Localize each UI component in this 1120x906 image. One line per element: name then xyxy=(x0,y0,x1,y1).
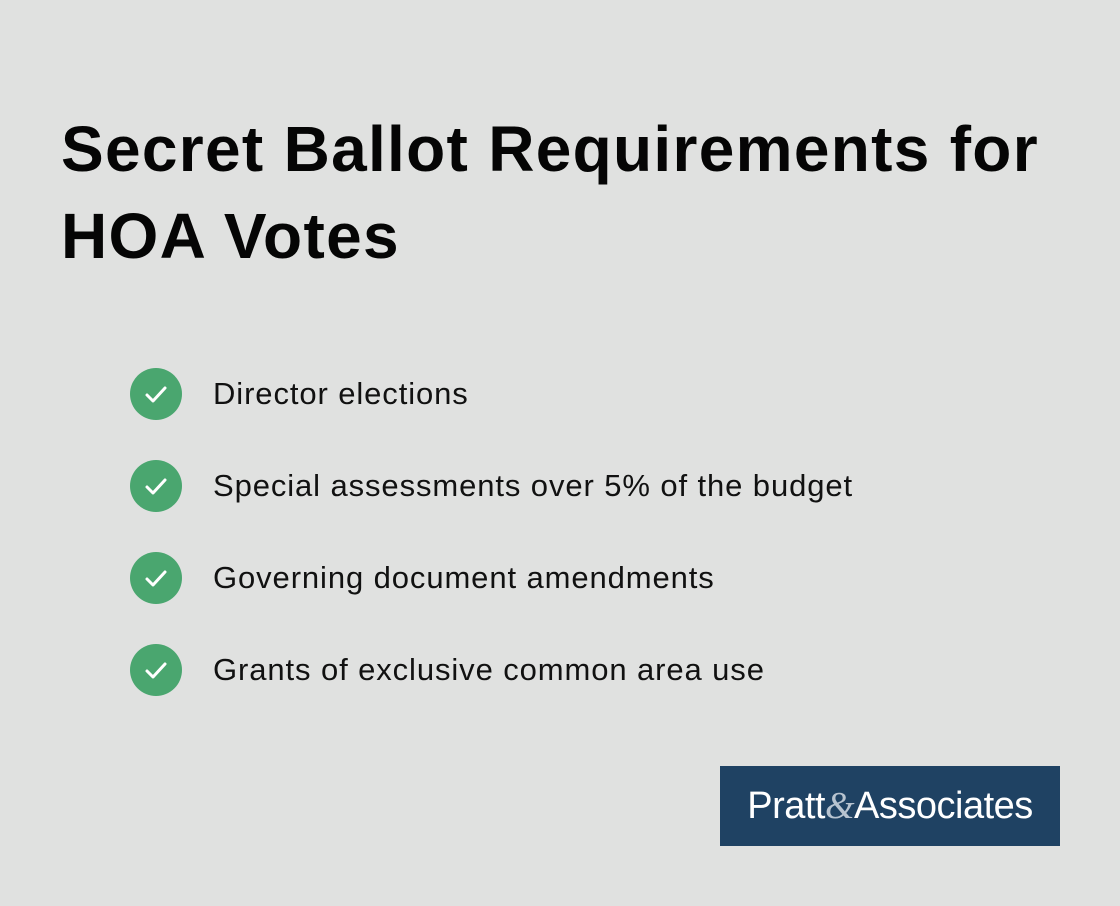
list item: special assessments xyxy=(130,460,853,512)
logo: Pratt&Associates xyxy=(747,785,1033,827)
icon: check xyxy=(130,368,182,420)
title xyxy=(61,113,1039,272)
list item: exclusive use xyxy=(130,644,765,696)
list item: governing docs xyxy=(130,552,715,604)
title: Secret Ballot Requirements for xyxy=(61,113,1039,185)
text: Governing document amendments xyxy=(213,560,715,595)
text: Grants of exclusive common area use xyxy=(213,652,765,687)
logo xyxy=(720,766,1060,846)
title: HOA Votes xyxy=(61,200,400,272)
text: Director elections xyxy=(213,376,469,411)
list item: director elections xyxy=(130,368,469,420)
icon: check xyxy=(130,552,182,604)
icon: check xyxy=(130,644,182,696)
text: Special assessments over 5% of the budget xyxy=(213,468,853,503)
icon: check xyxy=(130,460,182,512)
